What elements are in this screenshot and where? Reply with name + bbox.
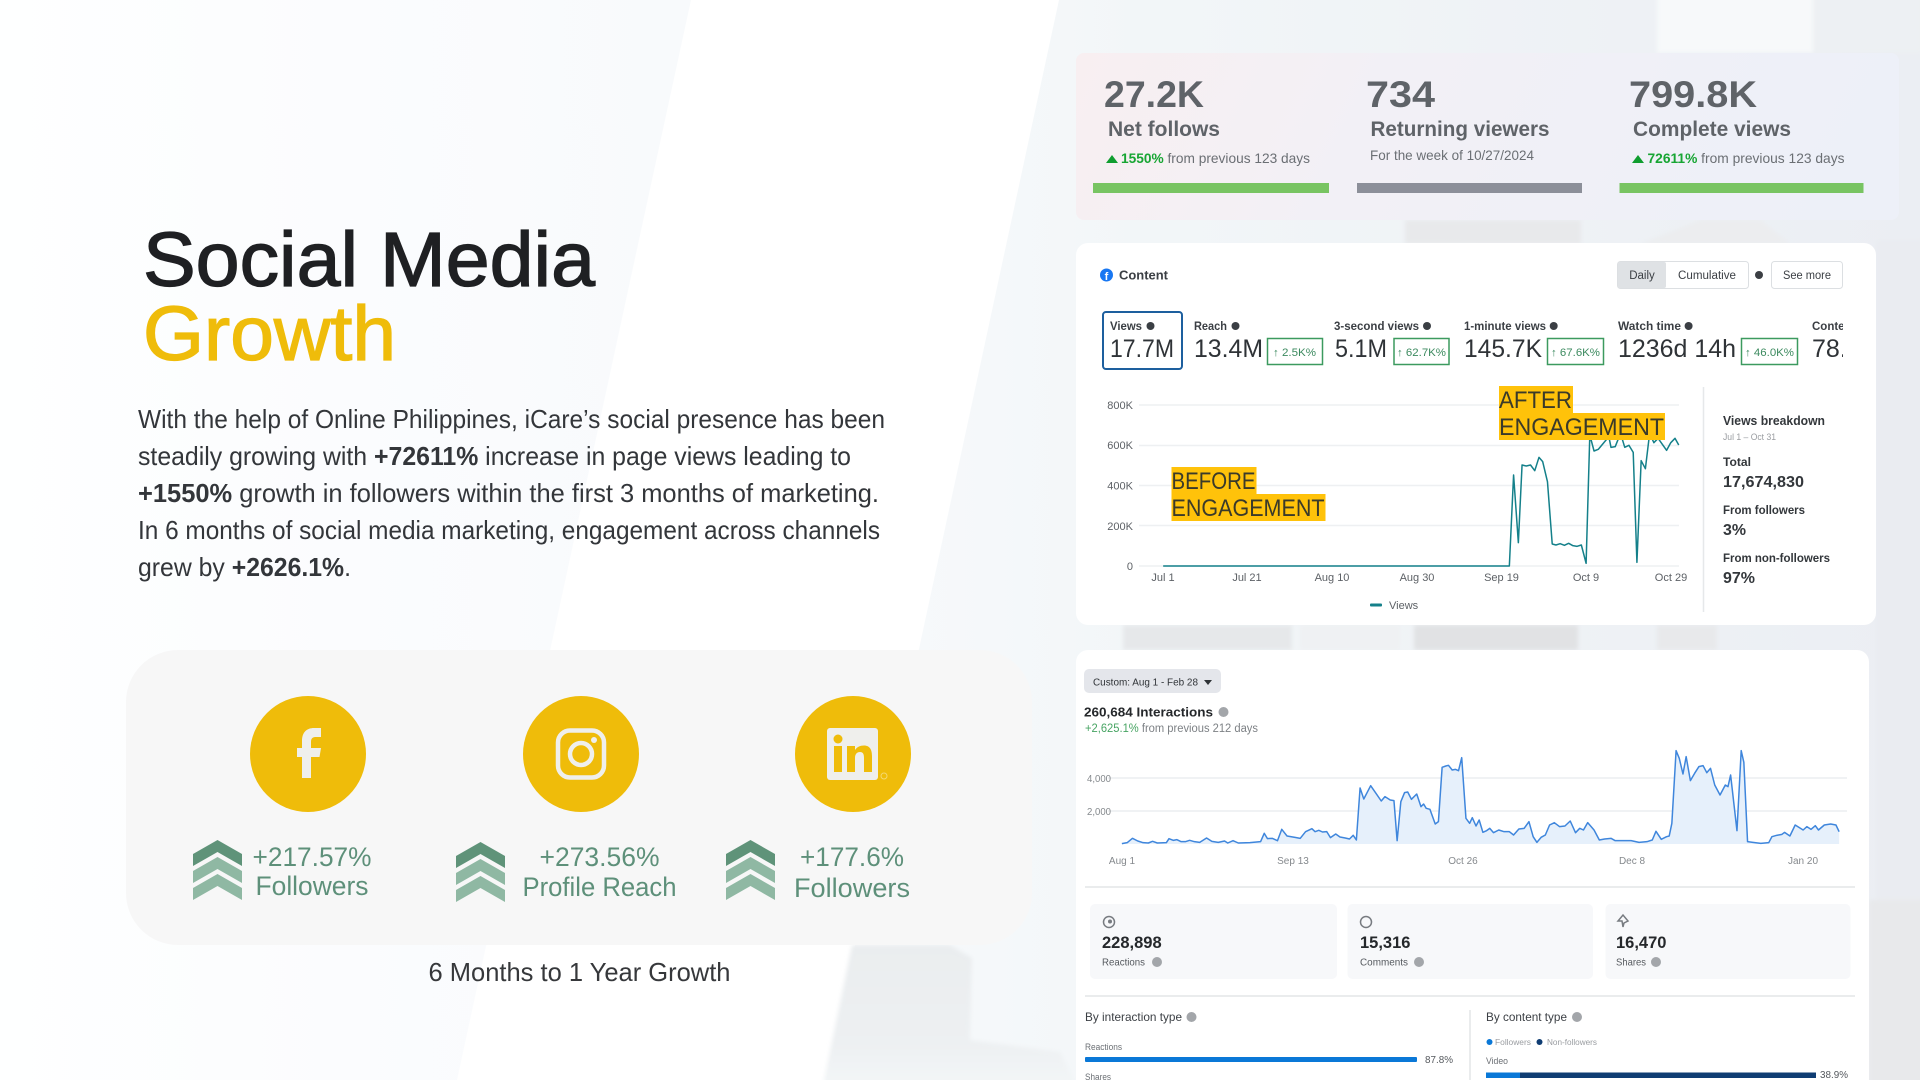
- bars: by interaction type: 87.8%: [1425, 1054, 1453, 1066]
- stat: returning viewers: [1357, 74, 1582, 193]
- title line 1: Social Media: [143, 217, 595, 303]
- icon: facebook small: [1100, 268, 1113, 283]
- line chart: views: Jul 1: [1151, 572, 1175, 584]
- stat: complete views: [1620, 74, 1864, 193]
- area chart: interactions: Oct 26: [1448, 856, 1478, 867]
- callout: after engagement: AFTER: [1499, 387, 1572, 414]
- metric: watch time: Watch time: [1618, 321, 1681, 333]
- views breakdown: From followers: [1723, 503, 1805, 517]
- stat: instagram profile reach: +273.56%: [540, 842, 660, 872]
- metric: 3-second views: 5.1M: [1335, 335, 1387, 363]
- body paragraph: +1550% growth in followers within the first 3 months of marketing.: [138, 478, 879, 508]
- line chart: views: 600K: [1107, 440, 1134, 452]
- stat: complete views: 72611% from previous 123 days: [1648, 150, 1844, 166]
- stat: net follows: 27.2K: [1104, 74, 1204, 115]
- card: shares: Shares: [1616, 956, 1646, 968]
- heading: interactions total: +2,625.1% from previous 212 days: [1085, 723, 1258, 735]
- bars: by interaction type: Reactions: [1085, 1042, 1122, 1052]
- line chart: views: [1107, 400, 1687, 612]
- button: see more: See more: [1783, 270, 1831, 282]
- body paragraph: With the help of Online Philippines, iCare’s social presence has been: [138, 404, 885, 434]
- icon: linkedin: [795, 696, 911, 812]
- heading: content: Content: [1119, 268, 1169, 282]
- dropdown: date range: [1084, 669, 1221, 693]
- stat: instagram profile reach: [522, 842, 676, 902]
- chevrons: instagram growth: [456, 842, 505, 902]
- views breakdown: From non-followers: [1723, 551, 1830, 565]
- stat: returning viewers: Returning viewers: [1370, 118, 1550, 141]
- bars: by content type: Non-followers: [1547, 1038, 1597, 1047]
- callout: before engagement: [1172, 467, 1326, 522]
- toggle: daily cumulative: Cumulative: [1678, 270, 1736, 282]
- area chart: interactions: Sep 13: [1277, 856, 1309, 867]
- metric: watch time: ↑ 46.0K%: [1745, 347, 1794, 359]
- chevrons: facebook growth: [193, 840, 242, 900]
- stat: complete views: 799.8K: [1629, 74, 1757, 115]
- callout: after engagement: [1499, 386, 1665, 441]
- line chart: views: 400K: [1107, 480, 1134, 492]
- line chart: views: Sep 19: [1484, 572, 1519, 584]
- icon: info: [1755, 271, 1763, 279]
- line chart: views: 0: [1127, 561, 1133, 573]
- chevrons: linkedin growth: [726, 840, 775, 900]
- bars: by interaction type: [1085, 1010, 1453, 1080]
- stat: complete views: Complete views: [1633, 118, 1791, 141]
- stat: returning viewers: 734: [1366, 74, 1435, 115]
- stat: facebook followers: [252, 842, 372, 901]
- panel: social growth channels: [126, 650, 1032, 945]
- stat: linkedin followers: Followers: [794, 873, 910, 903]
- caption: growth period: 6 Months to 1 Year Growth: [428, 957, 730, 987]
- card: reactions: Reactions: [1102, 956, 1145, 968]
- metric: 1-minute views: 1-minute views: [1464, 321, 1546, 333]
- card: reactions: [1102, 916, 1162, 967]
- toggle: daily cumulative: [1618, 262, 1748, 288]
- callout: before engagement: ENGAGEMENT: [1172, 495, 1325, 522]
- card: comments: [1360, 916, 1424, 967]
- views breakdown: 17,674,830: [1723, 474, 1804, 491]
- stat: net follows: Net follows: [1108, 118, 1220, 141]
- line chart: views: Oct 29: [1655, 572, 1687, 584]
- views breakdown: [1704, 387, 1830, 612]
- icon: facebook: [250, 696, 366, 812]
- metric: 3-second views: [1334, 321, 1449, 364]
- card: shares: 16,470: [1616, 934, 1666, 952]
- metric: views (selected): [1103, 312, 1182, 369]
- card: comments: 15,316: [1360, 934, 1410, 952]
- views breakdown: Views breakdown: [1723, 414, 1825, 428]
- metric: content clipped: Content: [1812, 321, 1856, 333]
- line chart: views: 800K: [1107, 400, 1134, 412]
- stat: net follows: 1550% from previous 123 days: [1121, 150, 1310, 166]
- panel: interactions: [1076, 650, 1869, 1080]
- title line 2: Growth: [143, 291, 396, 377]
- area chart: interactions: Aug 1: [1109, 856, 1136, 867]
- bars: by content type: Followers: [1495, 1038, 1531, 1047]
- bars: by content type: By content type: [1486, 1010, 1567, 1024]
- panel: top stats: [1076, 53, 1899, 220]
- icon: instagram: [523, 696, 639, 812]
- body paragraph: grew by +2626.1%.: [138, 552, 351, 582]
- card: reactions: 228,898: [1102, 934, 1162, 952]
- area chart: interactions: [1087, 751, 1847, 867]
- metric: 1-minute views: ↑ 67.6K%: [1551, 347, 1600, 359]
- title: [143, 217, 595, 377]
- views breakdown: Total: [1723, 455, 1751, 469]
- card: comments: Comments: [1360, 956, 1408, 968]
- metric: watch time: [1618, 321, 1798, 364]
- metric: watch time: 1236d 14h: [1618, 335, 1736, 363]
- metric: views (selected): Views: [1110, 321, 1142, 333]
- stat: linkedin followers: +177.6%: [800, 842, 904, 872]
- metric: reach: 13.4M: [1194, 335, 1263, 363]
- views breakdown: Jul 1 – Oct 31: [1723, 432, 1776, 442]
- views breakdown: 97%: [1723, 570, 1755, 587]
- line chart: views: Aug 10: [1315, 572, 1349, 584]
- stat: linkedin followers: [794, 842, 910, 903]
- area chart: interactions: Dec 8: [1619, 856, 1645, 867]
- body paragraph: In 6 months of social media marketing, engagement across channels: [138, 515, 880, 545]
- heading: interactions total: 260,684 Interactions: [1084, 704, 1213, 720]
- metric: views (selected): 17.7M: [1110, 335, 1174, 363]
- dropdown: date range: Custom: Aug 1 - Feb 28: [1093, 676, 1198, 688]
- area chart: interactions: 2,000: [1087, 807, 1111, 818]
- area chart: interactions: Jan 20: [1788, 856, 1818, 867]
- stat: instagram profile reach: Profile Reach: [522, 872, 676, 902]
- stat: net follows: [1093, 74, 1329, 193]
- metric: reach: Reach: [1194, 321, 1227, 333]
- button: see more: [1772, 262, 1842, 288]
- bars: by interaction type: By interaction type: [1085, 1010, 1182, 1024]
- body paragraph: [138, 404, 885, 582]
- metric: content clipped: [1812, 322, 1843, 357]
- stat: facebook followers: Followers: [256, 871, 368, 901]
- line chart: views: Jul 21: [1232, 572, 1262, 584]
- panel: content views: [1076, 243, 1878, 625]
- metric: reach: ↑ 2.5K%: [1273, 347, 1316, 359]
- metric: content clipped: 78.3K: [1812, 335, 1878, 363]
- line chart: views: Oct 9: [1573, 572, 1599, 584]
- body paragraph: steadily growing with +72611% increase in page views leading to: [138, 441, 851, 471]
- stat: returning viewers: For the week of 10/27/2024: [1370, 147, 1534, 163]
- callout: after engagement: ENGAGEMENT: [1499, 414, 1664, 441]
- icon: facebook small: f: [1105, 271, 1109, 283]
- heading: interactions total: [1084, 707, 1258, 734]
- line chart: views: 200K: [1107, 521, 1134, 533]
- metric: 1-minute views: [1464, 321, 1604, 364]
- line chart: views: Views: [1389, 600, 1419, 612]
- views breakdown: 3%: [1723, 522, 1746, 539]
- metric: 1-minute views: 145.7K: [1464, 335, 1542, 363]
- area chart: interactions: 4,000: [1087, 774, 1111, 785]
- metric: 3-second views: 3-second views: [1334, 321, 1419, 333]
- metric: 3-second views: ↑ 62.7K%: [1397, 347, 1446, 359]
- bars: by content type: Video: [1486, 1056, 1508, 1066]
- bars: by content type: [1486, 1010, 1848, 1080]
- card: shares: [1616, 914, 1666, 967]
- stat: facebook followers: +217.57%: [252, 842, 372, 872]
- callout: before engagement: BEFORE: [1172, 468, 1256, 495]
- metric: reach: [1194, 321, 1322, 364]
- line chart: views: Aug 30: [1400, 572, 1434, 584]
- toggle: daily cumulative: Daily: [1629, 270, 1655, 282]
